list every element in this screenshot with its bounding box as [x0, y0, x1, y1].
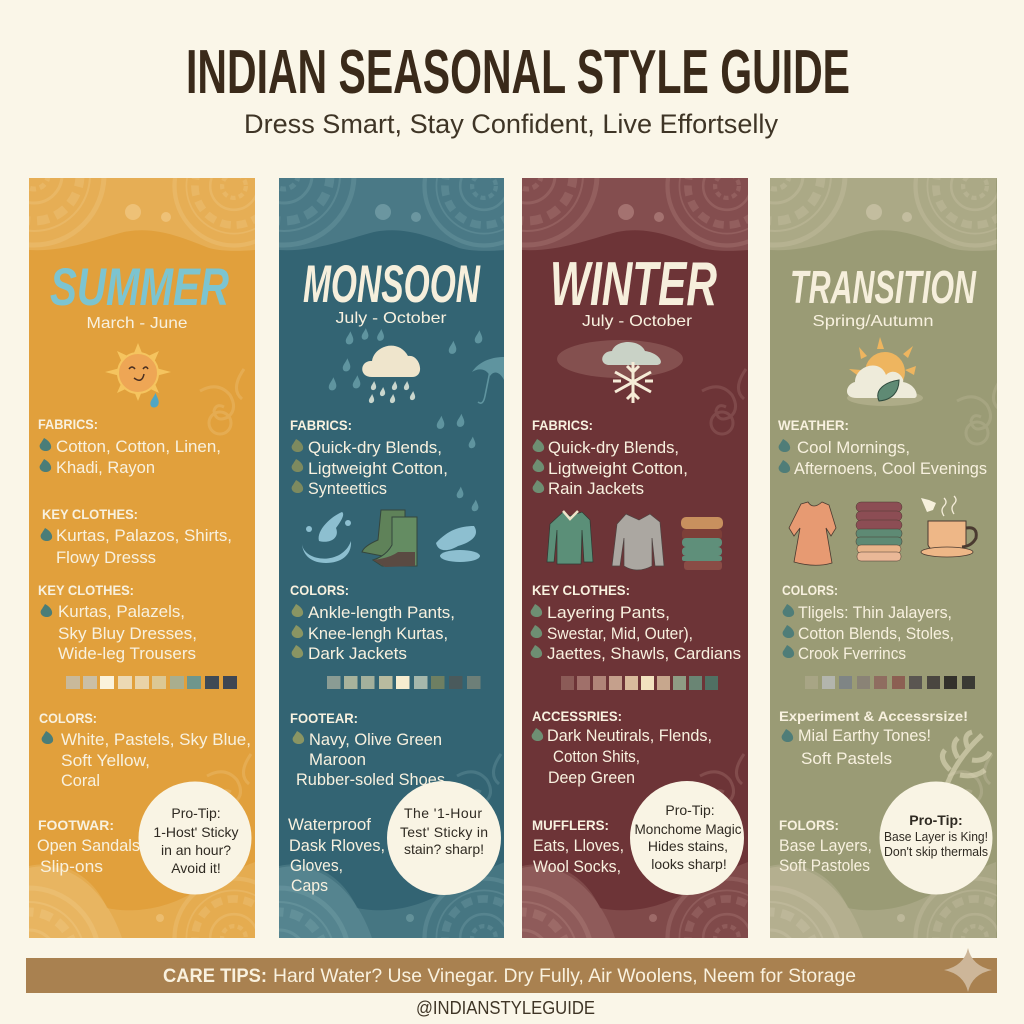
text block: key clothes 2 [38, 582, 197, 663]
icon: water splash [302, 512, 351, 563]
text block: fabrics: FABRICS: [290, 417, 352, 433]
text block: weather: WEATHER: [778, 417, 849, 433]
text block: experiment and accessorize: Experiment & Accessrsize! [779, 708, 968, 724]
text block: colors [290, 582, 455, 663]
text block: waterproof: Caps [291, 877, 328, 895]
icon: peach kurta dress [789, 502, 836, 565]
text block: fabrics: Cotton, Cotton, Linen, [56, 438, 221, 456]
text block: key clothes: Layering Pants, [547, 604, 670, 622]
text block: footwear: Rubber-soled Shoes [296, 771, 445, 789]
icon: rain boots [362, 510, 417, 567]
subtitle: Dress Smart, Stay Confident, Live Effortselly [244, 109, 778, 139]
icon: stacked fabrics [856, 502, 902, 561]
text block: fabrics: FABRICS: [532, 417, 593, 433]
icon: puddle [436, 526, 480, 562]
panel: summer [29, 178, 255, 938]
text block: accessories [532, 708, 712, 787]
icon: green sweater [547, 511, 593, 564]
callout: pro-tip summer: Pro-Tip: [171, 805, 221, 821]
text block: weather: Afternoens, Cool Evenings [794, 460, 987, 478]
colour swatches: winter [561, 676, 718, 690]
callout: pro-tip summer [138, 782, 252, 894]
date range: transition: Spring/Autumn [812, 313, 934, 330]
text block: footwear: Open Sandals [37, 837, 140, 855]
icon: snow cloud [557, 340, 683, 403]
callout: pro-tip winter: Monchome Magic [634, 821, 742, 837]
text block: colors: COLORS: [290, 582, 349, 598]
text block: key clothes 1: Flowy Dresss [56, 549, 156, 567]
text block: fabrics [38, 416, 221, 477]
text block: key clothes: Swestar, Mid, Outer), [547, 625, 693, 643]
icon: smiling sun with drop [105, 343, 171, 408]
text block: fabrics: FABRICS: [38, 416, 98, 432]
text block: fabrics [290, 417, 448, 498]
text block: fabrics: Khadi, Rayon [56, 459, 155, 477]
text block: key clothes 2: Kurtas, Palazels, [58, 603, 185, 621]
text block: colors: White, Pastels, Sky Blue, [61, 731, 251, 749]
icon: grey cardigan [612, 514, 664, 570]
text block: waterproof: Waterproof [288, 816, 371, 834]
care tips banner: CARE TIPS: [163, 966, 267, 987]
text block: accessories: Deep Green [548, 769, 635, 787]
panel: transition [770, 178, 997, 938]
text block: colors: Cotton Blends, Stoles, [798, 625, 954, 643]
text block: fabrics: Rain Jackets [548, 480, 644, 498]
callout: pro-tip summer: in an hour? [161, 842, 231, 858]
callout: pro-tip transition: Don't skip thermals [884, 845, 988, 859]
text block: experiment and accessorize [779, 708, 968, 768]
text block: weather [778, 417, 987, 478]
callout: pro-tip monsoon: Test' Sticky in [400, 824, 488, 840]
text block: colors: Soft Yellow, [61, 752, 150, 770]
text block: fabrics: Ligtweight Cotton, [308, 460, 448, 478]
text block: fabrics [532, 417, 688, 498]
callout: pro-tip monsoon: The '1-Hour [404, 805, 482, 821]
text block: colors: Ankle-length Pants, [308, 604, 455, 622]
text block: base layers: Soft Pastoles [779, 857, 870, 875]
panel: monsoon [279, 178, 504, 938]
text block: key clothes: KEY CLOTHES: [532, 582, 630, 598]
text block: mufflers: MUFFLERS: [532, 817, 609, 833]
text block: experiment and accessorize: Mial Earthy Tones! [798, 727, 931, 745]
date range: summer: March - June [86, 315, 188, 332]
text block: mufflers: Wool Socks, [533, 858, 621, 876]
care tips banner: Hard Water? Use Vinegar. Dry Fully, Air Woolens, Neem for Storage [273, 966, 856, 987]
colour swatches: summer [66, 676, 237, 689]
date range: winter: July - October [582, 313, 693, 330]
icon: sun behind cloud with leaf [847, 337, 923, 406]
text block: key clothes 1 [41, 506, 232, 567]
callout: pro-tip winter: Pro-Tip: [665, 802, 715, 818]
text block: footwear: Slip-ons [40, 858, 103, 876]
text block: key clothes: Jaettes, Shawls, Cardians [547, 645, 741, 663]
text block: key clothes 1: KEY CLOTHES: [42, 506, 138, 522]
text block: fabrics: Quick-dry Blends, [308, 439, 442, 457]
text block: waterproof [288, 816, 385, 895]
callout: pro-tip winter [630, 781, 744, 895]
text block: footwear: FOOTEAR: [290, 710, 358, 726]
text block: colors: Crook Fverrincs [798, 645, 906, 663]
footer handle: @INDIANSTYLEGUIDE [416, 998, 595, 1018]
text block: colors: Coral [61, 772, 100, 790]
text block: key clothes 2: KEY CLOTHES: [38, 582, 134, 598]
text block: colors: COLORS: [782, 582, 838, 598]
text block: key clothes 2: Wide-leg Trousers [58, 645, 196, 663]
text block: colors: Knee-lengh Kurtas, [308, 625, 448, 643]
icon: star ornament [944, 948, 992, 992]
text block: base layers: Base Layers, [779, 837, 872, 855]
text block: footwear: Maroon [309, 751, 366, 769]
callout: pro-tip summer: 1-Host' Sticky [153, 824, 239, 840]
text block: colors: Dark Jackets [308, 645, 407, 663]
text block: footwear: FOOTWAR: [38, 817, 114, 833]
text block: experiment and accessorize: Soft Pastels [801, 750, 892, 768]
text block: mufflers [532, 817, 624, 876]
callout: pro-tip monsoon: stain? sharp! [404, 841, 484, 857]
heading: monsoon: MONSOON [303, 255, 481, 314]
care tips banner [26, 948, 997, 993]
heading: winter: WINTER [550, 250, 717, 319]
icon: tea cup with steam [921, 496, 976, 557]
date range: monsoon: July - October [336, 310, 447, 327]
text block: waterproof: Gloves, [290, 857, 343, 875]
text block: key clothes 2: Sky Bluy Dresses, [58, 625, 197, 643]
colour swatches: monsoon [327, 676, 480, 689]
text block: colors: Tligels: Thin Jalayers, [798, 604, 952, 622]
text block: key clothes 1: Kurtas, Palazos, Shirts, [56, 527, 232, 545]
heading: summer: SUMMER [50, 258, 229, 317]
text block: base layers: FOLORS: [779, 817, 839, 833]
callout: pro-tip winter: Hides stains, [648, 838, 728, 854]
icon: rain cloud with drops [329, 328, 504, 511]
text block: weather: Cool Mornings, [797, 439, 910, 457]
text block: base layers [779, 817, 872, 875]
callout: pro-tip transition: Pro-Tip: [909, 812, 963, 828]
text block: fabrics: Quick-dry Blends, [548, 439, 679, 457]
icon: folded clothes stack [681, 517, 723, 570]
text block: key clothes [531, 582, 741, 663]
text block: colors: COLORS: [39, 710, 97, 726]
callout: pro-tip winter: looks sharp! [651, 856, 727, 872]
text block: mufflers: Eats, Lloves, [533, 837, 624, 855]
text block: accessories: ACCESSRIES: [532, 708, 622, 724]
text block: fabrics: Ligtweight Cotton, [548, 460, 688, 478]
text block: footwear [37, 817, 140, 876]
text block: waterproof: Dask Rloves, [289, 837, 385, 855]
text block: footwear: Navy, Olive Green [309, 731, 442, 749]
text block: footwear [290, 710, 445, 789]
callout: pro-tip summer: Avoid it! [171, 860, 221, 876]
text block: colors [39, 710, 251, 790]
text block: fabrics: Synteettics [308, 480, 387, 498]
colour swatches: transition [805, 676, 975, 689]
text block: accessories: Dark Neutirals, Flends, [547, 727, 712, 745]
callout: pro-tip transition: Base Layer is King! [884, 830, 988, 844]
panel: winter [522, 178, 748, 938]
text block: colors [782, 582, 954, 663]
callout: pro-tip monsoon [387, 781, 501, 895]
text block: accessories: Cotton Shits, [553, 748, 640, 766]
callout: pro-tip transition [880, 782, 992, 894]
